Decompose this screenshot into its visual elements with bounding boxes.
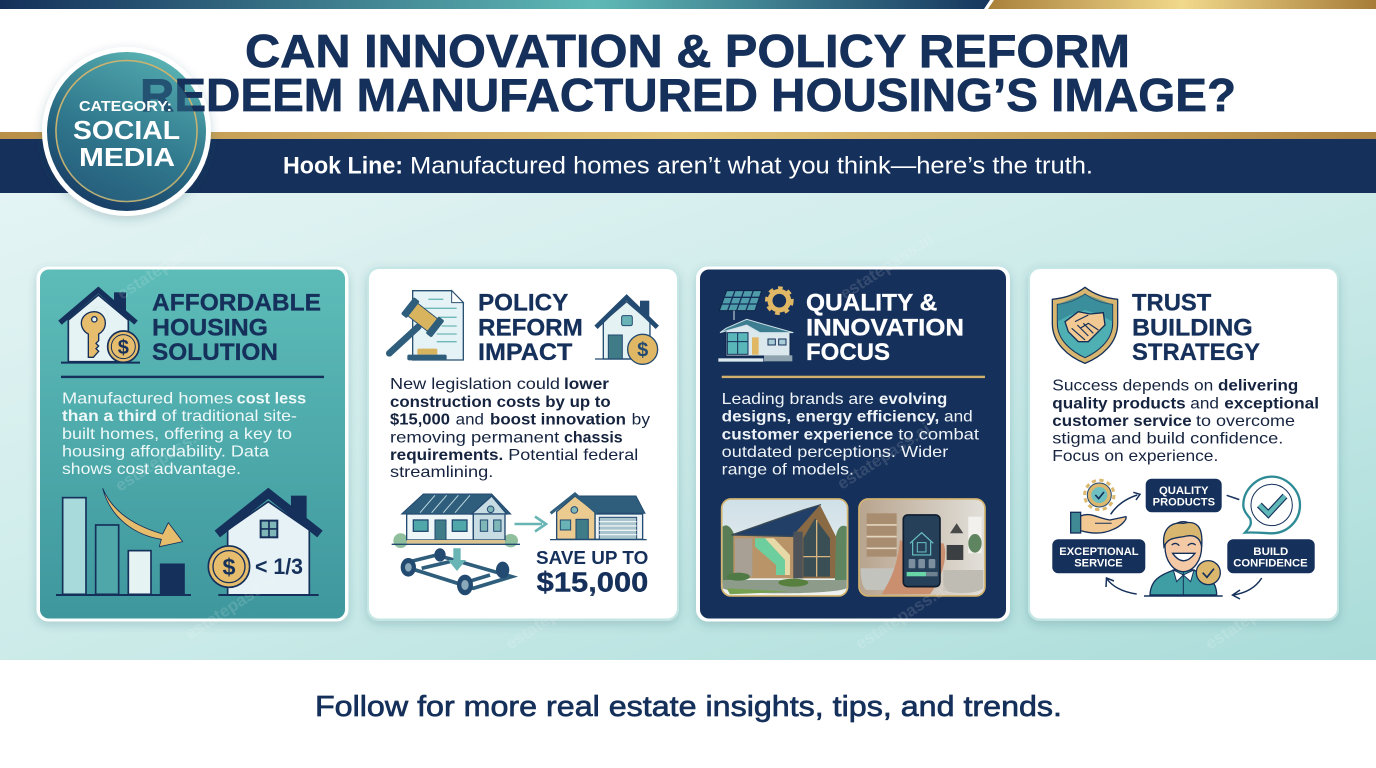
icon: gavel and document (389, 291, 463, 360)
body text: chassis (564, 429, 623, 446)
body text: cost less (237, 390, 306, 408)
badge tint over title (56, 62, 196, 202)
body text: requirements. (390, 447, 503, 464)
footer background (0, 660, 1376, 768)
watermarks: estatepass.ai (114, 229, 214, 303)
heading (478, 290, 583, 366)
icon: house with coin (208, 493, 320, 595)
bar chart with arrow (56, 488, 191, 595)
icon: house with coin: $ (222, 554, 235, 580)
heading (806, 290, 964, 366)
savings callout: SAVE UP TO (536, 548, 648, 568)
body text: designs, energy efficiency, (722, 409, 939, 426)
body text (722, 391, 980, 478)
pill: build confidence: CONFIDENCE (1233, 558, 1308, 570)
heading (152, 290, 321, 366)
body text: customer experience (722, 426, 893, 443)
watermarks: estatepass.ai (182, 569, 282, 643)
pill: exceptional service (1052, 539, 1145, 573)
pill: build confidence: BUILD (1253, 546, 1288, 558)
heading: TRUST (1132, 290, 1212, 317)
hook line band (0, 139, 1376, 193)
icon: smiling customer (1144, 522, 1223, 596)
watermarks (112, 229, 1302, 653)
body text: evolving (879, 391, 947, 408)
body text: $15,000 (390, 412, 450, 429)
body text: of traditional site- (162, 408, 297, 425)
body text: and (1190, 395, 1219, 412)
pill: build confidence (1227, 539, 1315, 573)
icon: house with dollar coin: $ (637, 340, 648, 362)
savings callout (536, 548, 648, 598)
body text: New legislation could (390, 376, 560, 393)
photo: smart home phone app (859, 499, 985, 596)
category badge (42, 47, 211, 216)
icon: speech bubble check (1227, 477, 1300, 533)
badge text: SOCIAL (73, 115, 180, 145)
body text: Potential federal (508, 447, 638, 464)
illustration: smaller house with garage (550, 494, 647, 540)
watermarks: estatepass.ai (837, 229, 937, 303)
body text: outdated perceptions. Wider (722, 444, 949, 461)
watermarks: estatepass.ai (852, 579, 952, 653)
heading: AFFORDABLE (152, 290, 321, 317)
body text: quality products (1052, 395, 1186, 412)
body text (390, 376, 650, 481)
heading: IMPACT (478, 339, 573, 366)
heading: QUALITY & (806, 290, 937, 317)
icon: house with key and coin: $ (118, 337, 129, 359)
photo: modern solar home (722, 499, 848, 596)
icon: house with dollar coin (595, 297, 658, 364)
arrows: trust cycle (1106, 578, 1262, 599)
heading: INNOVATION (806, 314, 964, 341)
body text: Focus on experience. (1052, 448, 1218, 465)
illustration: house without chassis (392, 494, 520, 548)
top accent bar (0, 0, 1376, 10)
watermarks: estatepass.ai (112, 421, 212, 495)
body text: than a third (62, 408, 157, 425)
heading: HOUSING (152, 314, 268, 341)
body text: housing affordability. Data (62, 444, 269, 461)
body text: by (632, 412, 650, 429)
icon: house with key and coin (60, 290, 140, 363)
pill: quality products: QUALITY (1159, 485, 1209, 497)
heading: STRATEGY (1132, 339, 1260, 366)
body text: stigma and build confidence. (1052, 430, 1283, 447)
watermarks: estatepass.ai (1202, 579, 1302, 653)
watermarks: estatepass.ai (834, 419, 934, 493)
body text: exceptional (1224, 395, 1319, 412)
body text: delivering (1218, 378, 1298, 395)
panel: affordable housing solution (36, 266, 348, 622)
body text: to overcome (1196, 413, 1295, 430)
heading: REFORM (478, 314, 583, 341)
pill: exceptional service: EXCEPTIONAL (1059, 546, 1139, 558)
body text: boost innovation (490, 412, 626, 429)
badge text (73, 98, 180, 172)
hook line band: Manufactured homes aren’t what you think—here’s the truth. (410, 152, 1093, 180)
body text (62, 390, 306, 478)
body text: Manufactured homes (62, 390, 233, 408)
body text: customer service (1052, 413, 1192, 430)
title: REDEEM MANUFACTURED HOUSING’S IMAGE? (140, 69, 1236, 121)
body text: lower (564, 376, 609, 393)
less than one third label: < 1/3 (255, 554, 303, 579)
watermarks: estatepass.ai (502, 579, 602, 653)
body text (1052, 378, 1319, 465)
body text: built homes, offering a key to (62, 426, 292, 443)
body text: shows cost advantage. (62, 461, 241, 478)
body text: removing permanent (390, 429, 560, 446)
icon: shield with handshake (1052, 287, 1118, 363)
footer call to action: Follow for more real estate insights, tips, and trends. (315, 691, 1062, 723)
title: CAN INNOVATION & POLICY REFORM (245, 25, 1130, 77)
heading: SOLUTION (152, 339, 278, 366)
hook line band: Hook Line: (283, 152, 403, 180)
heading: POLICY (478, 290, 568, 317)
panel: policy reform impact (367, 267, 679, 621)
body text: construction costs by up to (390, 394, 611, 411)
panel: trust building strategy (1028, 267, 1339, 621)
icon: gear and hand (1071, 480, 1140, 533)
badge text: MEDIA (79, 142, 175, 172)
body text: and (944, 409, 973, 426)
title (140, 25, 1236, 121)
gold rule (0, 132, 1376, 139)
body text: to combat (898, 426, 980, 443)
icon: solar house and gear (718, 288, 793, 362)
body text: streamlining. (390, 464, 493, 481)
heading: BUILDING (1132, 314, 1253, 341)
content background (0, 193, 1376, 660)
savings callout: $15,000 (537, 567, 648, 598)
pill: quality products (1146, 479, 1222, 512)
pill: exceptional service: SERVICE (1074, 558, 1123, 570)
heading: FOCUS (806, 339, 890, 366)
body text: range of models. (722, 461, 854, 478)
illustration: chassis removal (401, 548, 512, 595)
body text: Leading brands are (722, 391, 874, 408)
body text: Success depends on (1052, 378, 1213, 395)
arrow: to new house (514, 516, 546, 532)
panel: quality and innovation focus (696, 266, 1010, 622)
body text: and (456, 412, 484, 429)
badge text: CATEGORY: (79, 98, 172, 115)
pill: quality products: PRODUCTS (1153, 497, 1215, 509)
heading (1132, 290, 1260, 366)
